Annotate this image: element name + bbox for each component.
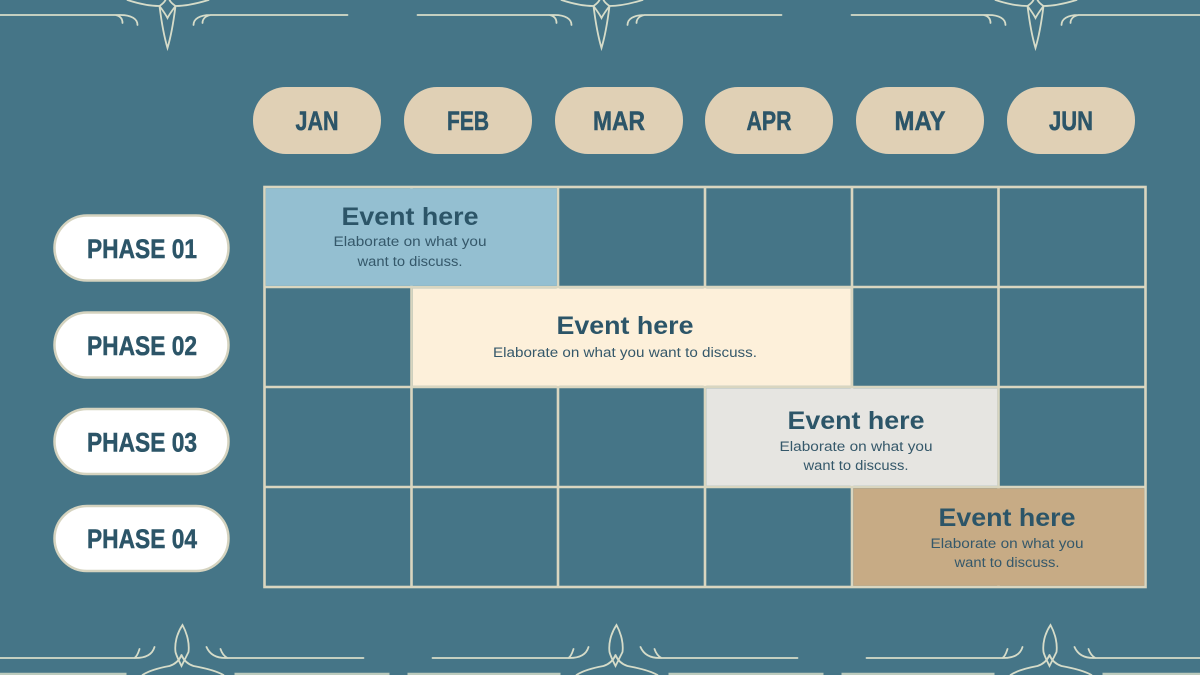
phase labels column xyxy=(54,216,228,571)
month: JAN: JAN xyxy=(296,106,338,136)
month: JUN: JUN xyxy=(1049,106,1093,136)
event: phase 01: want to discuss. xyxy=(356,254,462,269)
month: MAR: MAR xyxy=(593,106,645,136)
event: phase 03: want to discuss. xyxy=(802,458,908,473)
month: MAR xyxy=(555,87,683,154)
phase: 02: PHASE 02 xyxy=(87,331,197,361)
month: APR xyxy=(705,87,833,154)
event: phase 04 xyxy=(853,488,1144,586)
month: FEB xyxy=(404,87,532,154)
month: APR: APR xyxy=(746,106,792,136)
phase: 04 xyxy=(54,506,228,571)
ornament: top row xyxy=(0,0,1200,48)
event: phase 02 xyxy=(413,288,851,386)
phase: 03 xyxy=(54,409,228,474)
event: phase 01 xyxy=(266,188,557,286)
phase: 04: PHASE 04 xyxy=(87,524,197,554)
month: MAY xyxy=(856,87,984,154)
ornament: bottom row xyxy=(0,625,1200,675)
event: phase 04: Elaborate on what you xyxy=(930,536,1084,551)
event: phase 01: Event here xyxy=(342,203,479,231)
phase: 02 xyxy=(54,312,228,378)
month header row xyxy=(253,87,1135,154)
month: JAN xyxy=(253,87,381,154)
event: phase 04: Event here xyxy=(938,504,1076,532)
event: phase 03 xyxy=(706,388,997,486)
event: phase 02: Elaborate on what you want to discuss. xyxy=(493,345,757,360)
phase: 03: PHASE 03 xyxy=(87,428,197,458)
timeline grid xyxy=(264,187,1146,587)
event: phase 03: Event here xyxy=(788,407,925,435)
event: phase 04: want to discuss. xyxy=(953,555,1060,570)
event: phase 01: Elaborate on what you xyxy=(334,234,486,249)
month: JUN xyxy=(1007,87,1135,154)
month: MAY: MAY xyxy=(894,106,946,136)
event: phase 03: Elaborate on what you xyxy=(780,439,932,454)
month: FEB: FEB xyxy=(447,106,489,136)
phase: 01 xyxy=(54,216,228,280)
event: phase 02: Event here xyxy=(556,312,694,340)
phase: 01: PHASE 01 xyxy=(87,234,197,264)
